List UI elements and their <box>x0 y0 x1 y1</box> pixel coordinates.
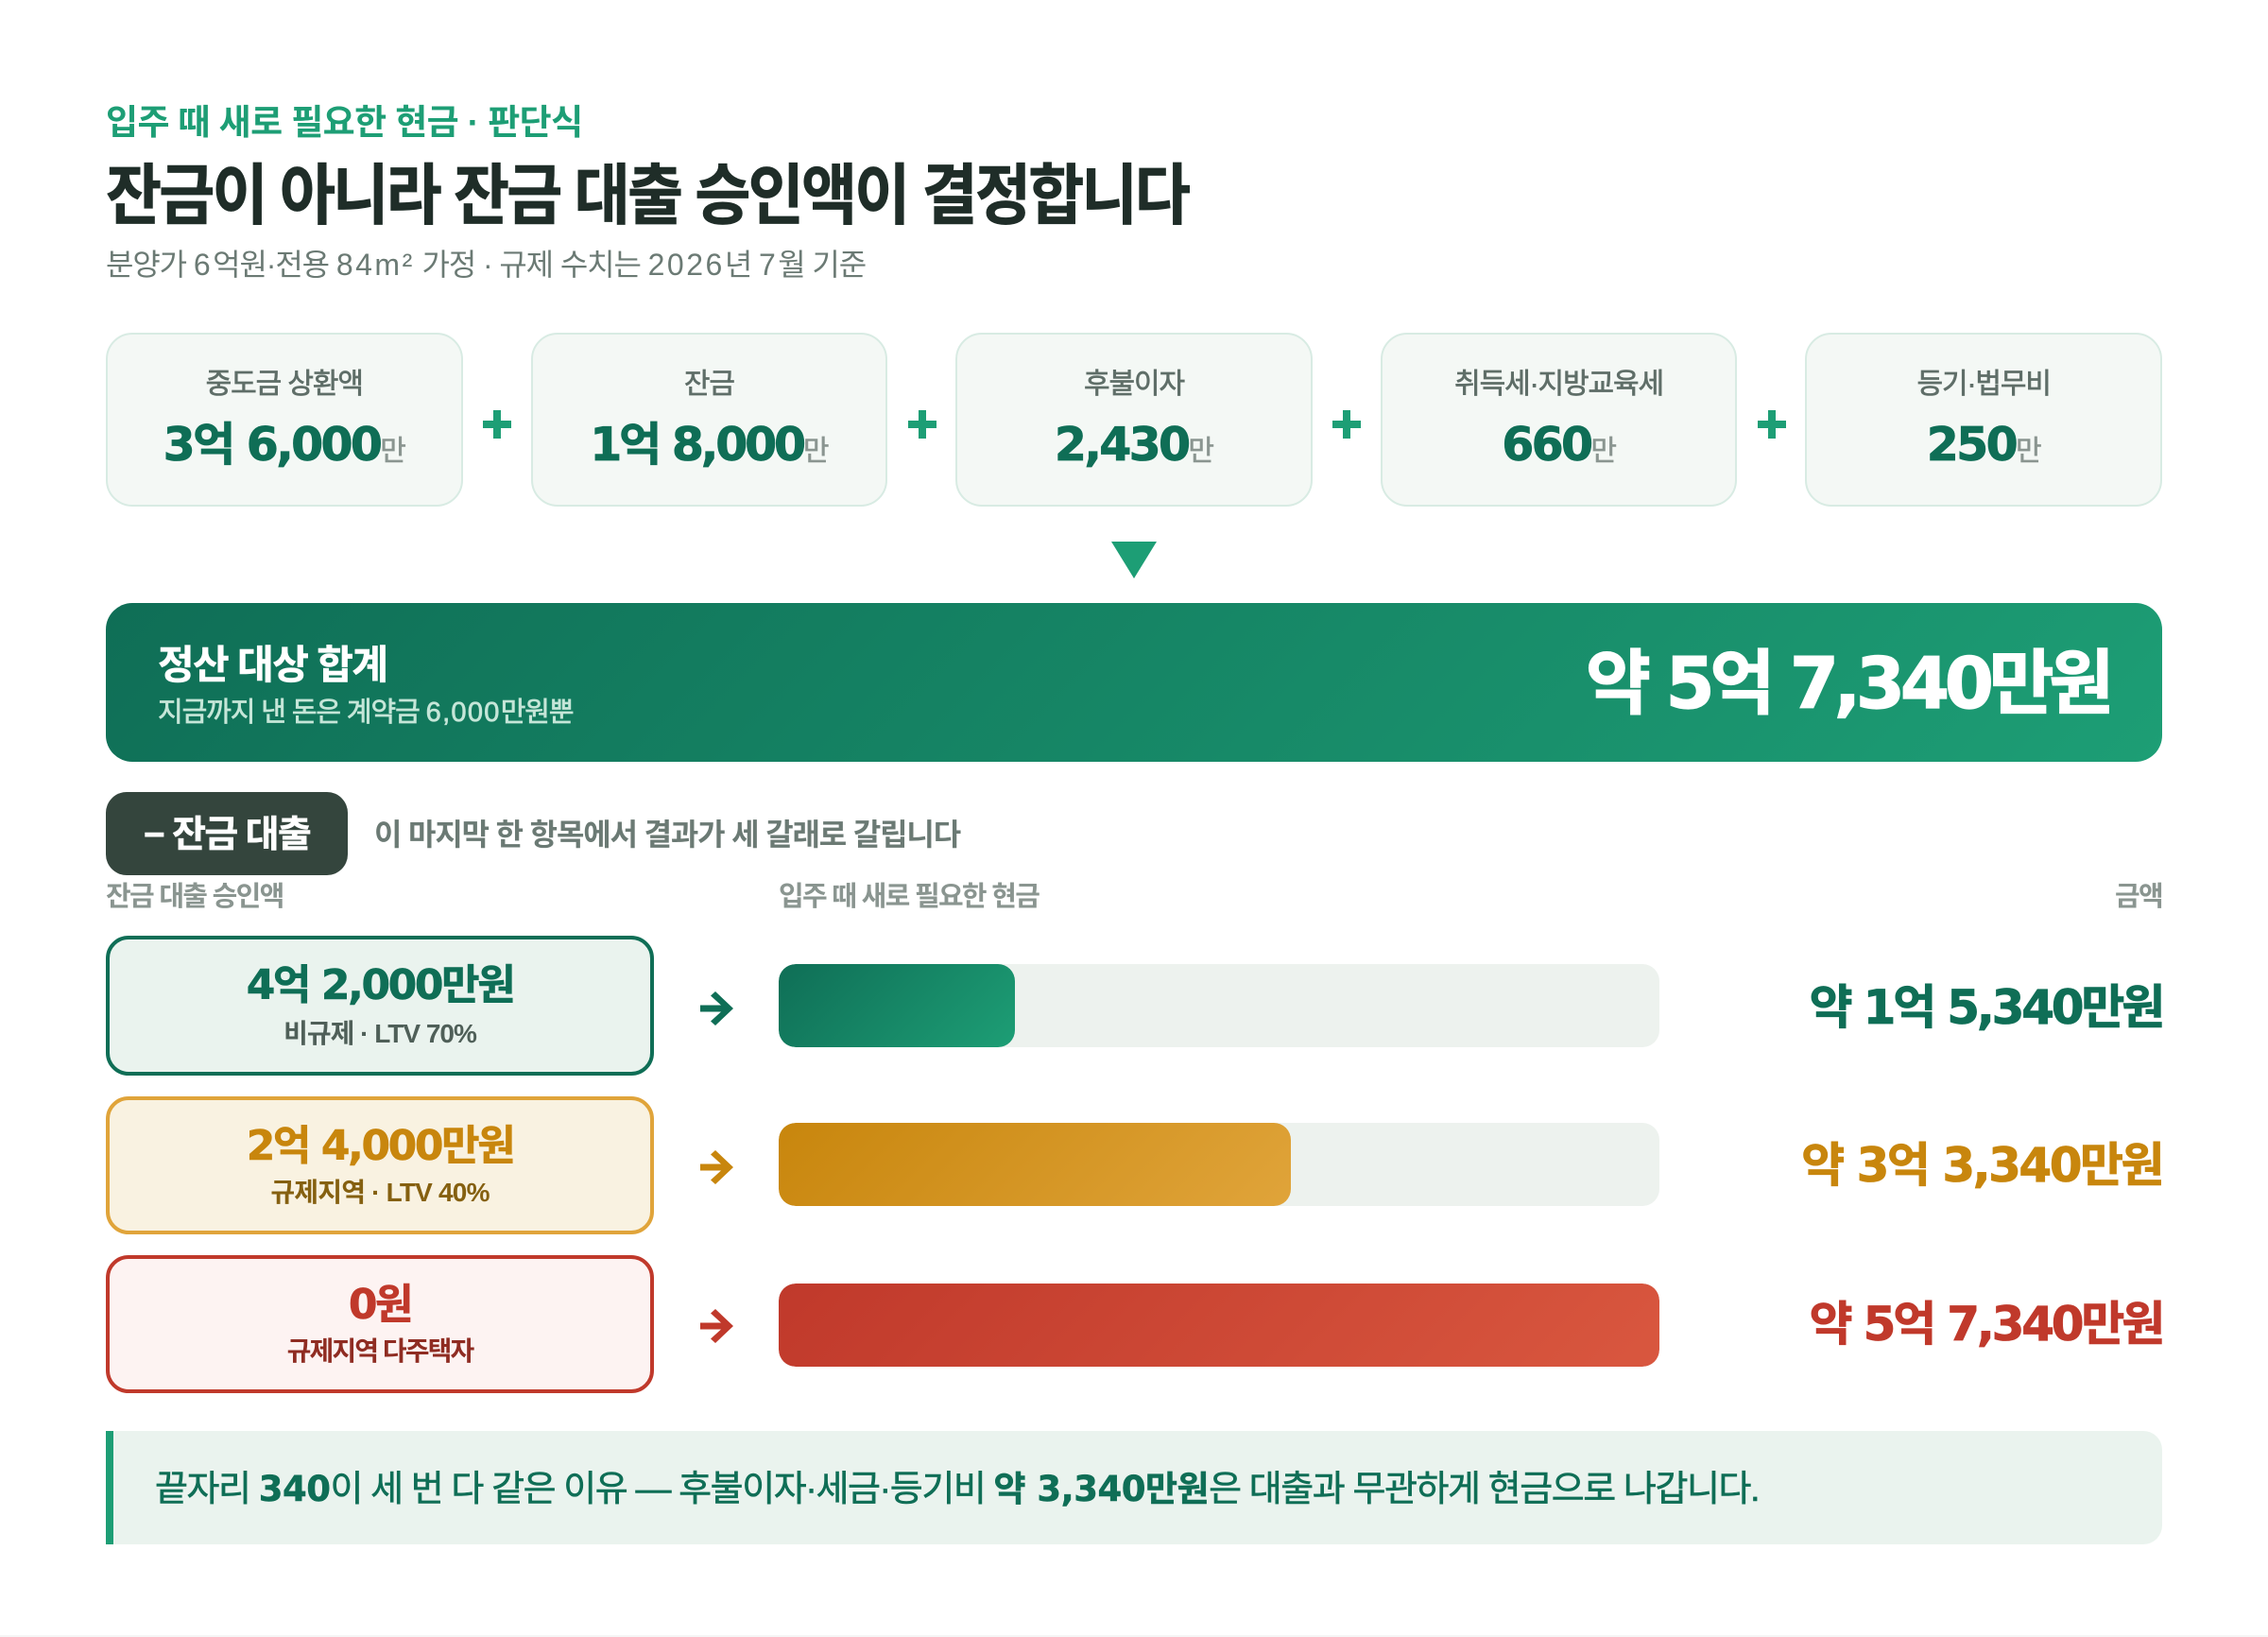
column heading: 현금: 입주 때 새로 필요한 현금 <box>779 882 1039 912</box>
row 1 arrow <box>700 991 733 1025</box>
row 2 bar <box>779 1123 1659 1206</box>
row 3 approval box: 0원 <box>349 1281 411 1329</box>
row 1 approval box <box>106 936 654 1076</box>
panel: total banner <box>106 603 2162 762</box>
badge note: 이 마지막 한 항목에서 결과가 세 갈래로 갈립니다 <box>374 818 960 852</box>
card: 취득세·지방교육세: 취득세·지방교육세 <box>1454 369 1663 400</box>
row 3 bar <box>779 1284 1659 1367</box>
card: 잔금: 잔금 <box>684 369 734 400</box>
card: 등기·법무비: 등기·법무비 <box>1916 369 2051 400</box>
card: 취득세·지방교육세: 660만 <box>1502 418 1616 472</box>
row 1 amount: 약 1억 5,340만원 <box>1810 980 2162 1035</box>
card: 후불이자 <box>955 333 1313 507</box>
row 2 approval box <box>106 1096 654 1234</box>
card: 취득세·지방교육세 <box>1381 333 1737 507</box>
row 3 amount: 약 5억 7,340만원 <box>1810 1297 2162 1352</box>
row 1 bar <box>779 964 1659 1047</box>
row 3 arrow <box>700 1309 733 1343</box>
bottom edge strip <box>0 1635 2268 1637</box>
column heading: 금액: 금액 <box>2115 882 2162 912</box>
row 2 arrow <box>700 1150 733 1184</box>
icon: plus 1 <box>483 410 511 439</box>
row 1 approval box: 비규제 · LTV 70% <box>284 1019 476 1048</box>
subtitle: 분양가 6억원·전용 84m² 가정 · 규제 수치는 2026년 7월 기준 <box>106 248 866 282</box>
card: 중도금 상환액 <box>106 333 463 507</box>
card: 잔금 <box>531 333 887 507</box>
row 2 amount: 약 3억 3,340만원 <box>1801 1138 2162 1193</box>
row 3 approval box: 규제지역 다주택자 <box>287 1336 472 1366</box>
card: 등기·법무비 <box>1805 333 2162 507</box>
card: 후불이자: 2,430만 <box>1055 418 1213 472</box>
icon: down triangle <box>1111 542 1157 578</box>
icon: plus 2 <box>908 410 936 439</box>
row 1 approval box: 4억 2,000만원 <box>247 961 513 1009</box>
icon: plus 4 <box>1758 410 1786 439</box>
panel: cost items row <box>106 333 2162 507</box>
card: 중도금 상환액: 중도금 상환액 <box>206 369 363 400</box>
eyebrow: 입주 때 새로 필요한 현금 · 판단식 <box>106 103 583 142</box>
card: 후불이자: 후불이자 <box>1084 369 1184 400</box>
badge: 잔금 대출 <box>106 792 348 875</box>
row 3 approval box <box>106 1255 654 1393</box>
callout: 끝자리 340이 세 번 다 같은 이유 — 후불이자·세금·등기비 약 3,340만원은 대출과 무관하게 현금으로 나갑니다. <box>155 1469 1759 1509</box>
row 2 approval box: 2억 4,000만원 <box>247 1122 513 1170</box>
badge: 잔금 대출: − 잔금 대출 <box>144 815 310 855</box>
banner subtext: 지금까지 낸 돈은 계약금 6,000만원뿐 <box>158 698 573 728</box>
title: 잔금이 아니라 잔금 대출 승인액이 결정합니다 <box>106 159 1188 233</box>
card: 중도금 상환액: 3억 6,000만 <box>163 418 405 472</box>
callout <box>106 1431 2162 1544</box>
column heading: 승인액: 잔금 대출 승인액 <box>106 882 284 912</box>
icon: plus 3 <box>1332 410 1361 439</box>
card: 등기·법무비: 250만 <box>1927 418 2041 472</box>
card: 잔금: 1억 8,000만 <box>590 418 828 472</box>
row 2 approval box: 규제지역 · LTV 40% <box>270 1178 490 1207</box>
banner total amount: 약 5억 7,340만원 <box>1586 642 2109 725</box>
banner heading: 정산 대상 합계 <box>158 643 387 687</box>
